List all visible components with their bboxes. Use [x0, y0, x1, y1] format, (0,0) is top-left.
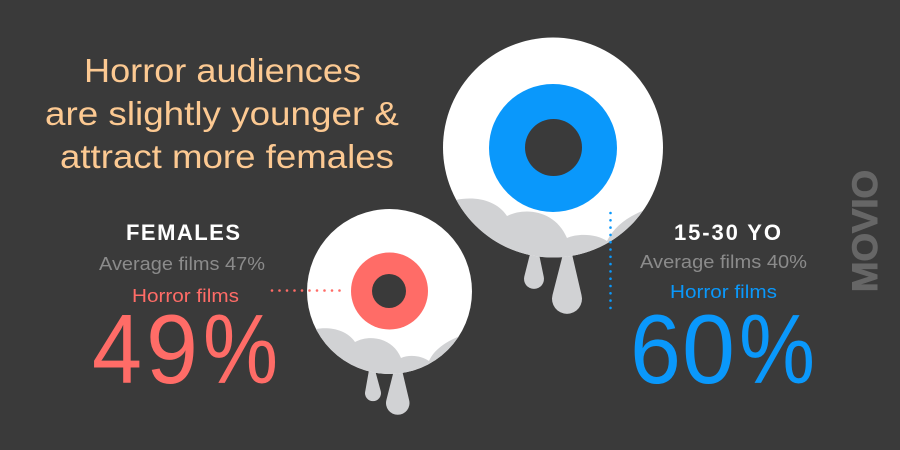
title	[45, 52, 399, 175]
icon: small coral eyeball	[305, 209, 475, 415]
title: attract more females	[60, 138, 394, 175]
average films figure: Average films 40%	[640, 251, 807, 272]
title: Horror audiences	[84, 52, 361, 89]
panel: females stats	[92, 220, 278, 404]
big number: 60%: 6	[630, 294, 681, 404]
big number: 49%	[92, 294, 278, 404]
title: are slightly younger &	[45, 95, 399, 132]
horror films label: Horror films	[670, 281, 777, 302]
heading: 15-30 yo: 15-30 YO	[674, 220, 781, 245]
big number: 49%: 4	[92, 294, 142, 404]
panel: 15-30 yo stats	[630, 220, 815, 404]
big number: 49%: 9	[146, 294, 198, 404]
coral dotted leader line	[272, 289, 340, 292]
heading: females: FEMALES	[126, 220, 240, 245]
infographic canvas	[46, 38, 878, 415]
big number: 60%: %	[739, 294, 815, 404]
average films figure: Average films 47%	[99, 253, 265, 274]
icon: large blue eyeball	[440, 38, 670, 314]
logo: movio: MOVIO	[846, 170, 885, 292]
big number: 60%: 0	[682, 294, 735, 404]
blue dotted leader line	[609, 213, 612, 309]
horror films label: Horror films	[132, 285, 239, 306]
big number: 49%: %	[203, 294, 278, 404]
big number: 60%	[630, 294, 815, 404]
